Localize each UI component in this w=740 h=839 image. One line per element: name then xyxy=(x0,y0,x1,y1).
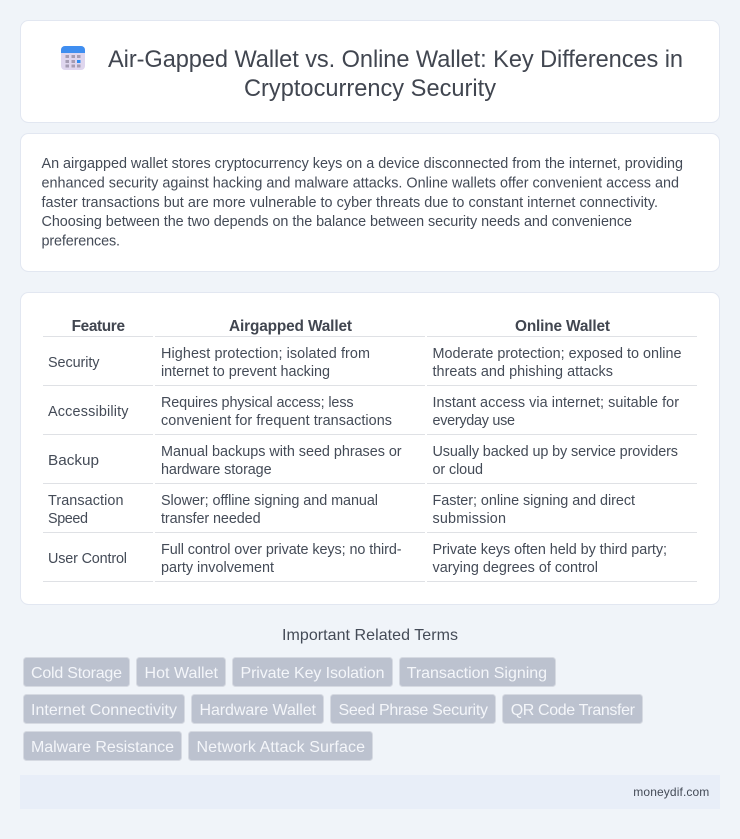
table row: accessibility: Instant access via internet; suitable for xyxy=(432,395,679,411)
text block: description: preferences. xyxy=(42,234,120,250)
table row: transaction speed: Transaction xyxy=(48,493,124,509)
table row: user control: Full control over private keys; no third- xyxy=(161,542,402,558)
footer bar xyxy=(20,775,720,809)
title: Air-Gapped Wallet vs. Online Wallet: Key Differences in xyxy=(108,47,683,73)
table row: accessibility: Accessibility xyxy=(48,404,129,420)
text block: description xyxy=(42,156,683,250)
table row: security: Security xyxy=(48,355,100,371)
table row: security xyxy=(43,346,697,386)
tag list: related terms: Malware Resistance xyxy=(31,739,174,756)
text block: description: faster transactions but are more vulnerable to cyber threats due to constant internet connectivity. xyxy=(42,195,658,211)
panel: comparison table xyxy=(20,292,720,604)
tag list: related terms: Network Attack Surface xyxy=(196,739,365,756)
tag list: related terms: Hot Wallet xyxy=(144,665,219,682)
table row: accessibility: Requires physical access; less xyxy=(161,395,354,411)
table row: transaction speed: Slower; offline signing and manual xyxy=(161,493,378,509)
table row: accessibility: everyday use xyxy=(432,413,515,429)
table row: accessibility xyxy=(43,395,697,435)
tag list: related terms: Internet Connectivity xyxy=(31,702,177,719)
table row: user control: party involvement xyxy=(161,560,274,576)
tag list: related terms: Transaction Signing xyxy=(407,665,547,682)
table row: transaction speed: transfer needed xyxy=(161,511,261,527)
tag list: related terms: Private Key Isolation xyxy=(240,665,384,682)
table row: backup: Backup xyxy=(48,453,99,469)
tag list: related terms: Hardware Wallet xyxy=(200,702,317,719)
text block: description: enhanced security against hacking and malware attacks. Online wallets offer convenient access and xyxy=(42,175,679,191)
table row: transaction speed xyxy=(43,493,697,533)
tag list: related terms: Seed Phrase Security xyxy=(338,702,488,719)
table row: backup: hardware storage xyxy=(161,462,272,478)
panel: header xyxy=(20,20,720,122)
table row: user control: Private keys often held by third party; xyxy=(432,542,667,558)
tag list: related terms: QR Code Transfer xyxy=(511,702,636,719)
footer bar: moneydif.com xyxy=(633,785,709,799)
table row: user control xyxy=(43,542,697,582)
table row: security: internet to prevent hacking xyxy=(161,364,330,380)
heading: important related terms: Important Related Terms xyxy=(282,627,458,644)
table header row: Online Wallet xyxy=(515,318,610,335)
table row: user control: User Control xyxy=(48,551,127,567)
text block: description: An airgapped wallet stores cryptocurrency keys on a device disconnected from the internet, providing xyxy=(42,156,683,172)
table row: security: Highest protection; isolated from xyxy=(161,346,370,362)
tag list: related terms: Cold Storage xyxy=(31,665,122,682)
tag list: related terms xyxy=(24,658,642,760)
title xyxy=(108,47,683,102)
table row: transaction speed: Faster; online signing and direct xyxy=(432,493,635,509)
table row: backup: or cloud xyxy=(432,462,483,478)
table row: security: Moderate protection; exposed to online xyxy=(432,346,682,362)
table row: user control: varying degrees of control xyxy=(432,560,598,576)
table row: transaction speed: submission xyxy=(432,511,506,527)
table row: backup xyxy=(43,444,697,484)
panel: description xyxy=(20,134,720,272)
table header row xyxy=(43,318,697,337)
table row: transaction speed: Speed xyxy=(48,511,88,527)
title: Cryptocurrency Security xyxy=(244,76,496,102)
table header row: Airgapped Wallet xyxy=(229,318,352,335)
icon: calendar grid xyxy=(61,46,85,70)
table row: backup: Manual backups with seed phrases or xyxy=(161,444,402,460)
text block: description: Choosing between the two depends on the balance between security needs and convenience xyxy=(42,214,632,230)
table header row: Feature xyxy=(72,318,125,335)
table row: backup: Usually backed up by service providers xyxy=(432,444,678,460)
table row: accessibility: convenient for frequent transactions xyxy=(161,413,392,429)
table row: security: threats and phishing attacks xyxy=(432,364,613,380)
